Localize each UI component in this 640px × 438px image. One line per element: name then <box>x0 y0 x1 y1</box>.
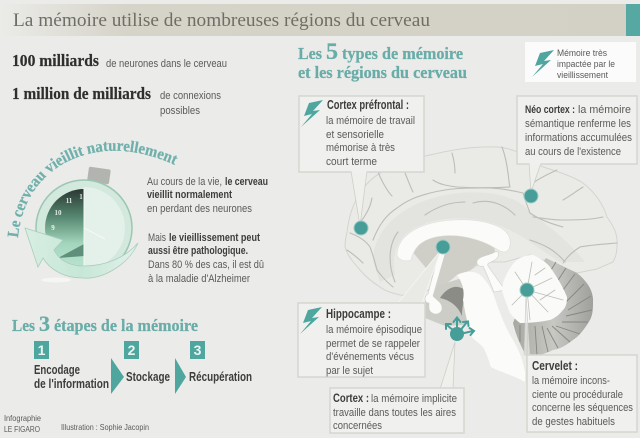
panel: cortex: concernées <box>333 420 382 432</box>
panel: cortex prefrontal: la mémoire de travail <box>326 115 415 127</box>
heading: 5 types <box>298 39 467 82</box>
icon: stopwatch with arrow: 11 <box>66 197 73 205</box>
icon: stopwatch with arrow: 10 <box>54 209 62 217</box>
panel: cortex: Cortex : <box>333 391 369 405</box>
pointer: cortex <box>440 342 455 389</box>
panel: cortex prefrontal: Cortex préfrontal : <box>327 98 409 112</box>
credits: Illustration : Sophie Jacopin <box>61 422 149 432</box>
text block: aging explanation: Mais <box>148 232 166 244</box>
panel: cervelet: Cervelet : <box>532 359 578 373</box>
panel: cervelet <box>524 295 637 432</box>
heading: 3 stages: étapes de la mémoire <box>54 316 198 335</box>
icon: stopwatch with arrow: 1 <box>79 193 83 201</box>
panel: hippocampe: la mémoire épisodique <box>326 324 422 336</box>
panel: cortex prefrontal: mémorise à très <box>326 142 395 154</box>
text block: aging explanation: à la maladie d'Alzheimer <box>148 273 250 285</box>
step 2: storage <box>124 341 170 384</box>
key figures: de connexions <box>160 90 221 102</box>
panel: neo cortex: Néo cortex : <box>525 104 575 116</box>
limbic grey region <box>411 232 495 296</box>
brain illustration <box>345 147 617 382</box>
text block: aging explanation: le vieillissement peut <box>169 232 260 244</box>
credits: Infographie <box>4 413 41 423</box>
panel: cortex prefrontal: et sensorielle <box>326 129 384 141</box>
step 1: encoding: Encodage <box>34 363 80 377</box>
credits: LE FIGARO <box>4 424 40 434</box>
icon: prefrontal bolt <box>301 100 323 127</box>
pineal and stalk <box>477 252 505 292</box>
text block: aging explanation: Dans 80 % des cas, il est dû <box>148 259 264 271</box>
cerebellum white matter <box>502 255 567 323</box>
icon: stopwatch with arrow <box>25 167 138 282</box>
credits <box>4 413 149 434</box>
panel: neo cortex: la mémoire <box>578 104 631 116</box>
panel: hippocampe: par le sujet <box>326 365 373 377</box>
panel: cortex prefrontal: court terme <box>326 156 377 168</box>
step 1: encoding: 1 <box>38 342 46 358</box>
arrow: step 2 to 3 <box>175 358 186 394</box>
marker: prefrontal <box>354 221 368 235</box>
icon: legend bolt <box>532 50 554 77</box>
panel: hippocampe: Hippocampe : <box>326 307 391 321</box>
cingulate shading <box>373 192 585 282</box>
text block: aging explanation <box>147 176 268 285</box>
text block: aging explanation: Au cours de la vie, <box>147 176 222 188</box>
heading: 5 types: 5 <box>326 39 338 64</box>
brainstem <box>457 272 525 382</box>
step 3: retrieval: 3 <box>194 342 202 358</box>
step 1: encoding: de l'information <box>34 377 109 391</box>
key figures: 100 milliards <box>12 51 99 70</box>
panel: hippocampe: d'événements vécus <box>326 351 414 363</box>
panel: hippocampe: permet de se rappeler <box>326 338 420 350</box>
heading: 3 stages <box>12 311 198 336</box>
step 2: storage: 2 <box>128 342 136 358</box>
text block: aging explanation: le cerveau <box>225 176 268 188</box>
legend: Mémoire très <box>557 48 607 58</box>
pointer: cervelet <box>524 295 530 355</box>
panel: cortex: travaille dans toutes les aires <box>333 407 456 419</box>
heading: 3 stages: 3 <box>39 311 50 336</box>
panel: cervelet: de gestes habituels <box>532 416 615 428</box>
lower grey region <box>425 278 472 326</box>
icon: hippocampe bolt <box>300 307 322 334</box>
step 3: retrieval: Récupération <box>189 370 252 384</box>
text block: aging explanation: vieillit normalement <box>147 189 232 201</box>
cerebrum <box>345 147 617 295</box>
legend: impactée par le <box>557 59 615 69</box>
heading: 5 types: Les <box>298 44 322 63</box>
text block: aging explanation: aussi être pathologique. <box>148 245 248 257</box>
marker: cortex with radiating arrows <box>446 318 474 341</box>
fornix and hippocampus <box>425 252 445 314</box>
key figures: de neurones dans le cerveau <box>106 58 227 70</box>
text block: aging explanation: en perdant des neurones <box>147 203 252 215</box>
panel: hippocampe <box>298 250 441 377</box>
key figures: possibles <box>160 105 200 117</box>
legend <box>525 42 636 82</box>
marker: neo cortex <box>524 189 538 203</box>
heading: 5 types: et les régions du cerveau <box>298 63 467 82</box>
heading: 3 stages: Les <box>12 316 35 335</box>
panel: cervelet: la mémoire incons- <box>532 375 610 387</box>
panel: cortex: la mémoire implicite <box>371 393 457 405</box>
arrow: step 1 to 2 <box>111 358 124 394</box>
panel: neo cortex: au cours de l'existence <box>525 146 621 158</box>
panel: cortex prefrontal <box>299 96 424 226</box>
marker: cervelet <box>520 283 534 297</box>
heading: 5 types: types de mémoire <box>342 44 463 63</box>
panel: neo cortex <box>517 96 637 192</box>
corpus callosum <box>397 220 510 261</box>
pointer: hippocampe <box>398 250 441 303</box>
step 2: storage: Stockage <box>126 370 170 384</box>
curved heading: aging brain: Le cerveau vieillit naturellement <box>7 140 178 238</box>
cerebellum lamellae <box>513 258 593 357</box>
step 3: retrieval <box>189 341 252 384</box>
header band <box>0 4 640 36</box>
key figures <box>12 51 227 117</box>
dark cavity <box>440 287 466 316</box>
legend: vieillissement <box>557 70 608 80</box>
icon: stopwatch with arrow: 9 <box>51 224 55 232</box>
panel: cortex <box>330 342 464 433</box>
marker: hippocampe <box>436 240 450 254</box>
key figures: 1 million de milliards <box>12 84 151 103</box>
panel: cervelet: ciente ou procédurale <box>532 389 623 401</box>
sulci <box>347 147 617 287</box>
title: La mémoire utilise de nombreuses régions du cerveau <box>13 10 431 31</box>
step 1: encoding <box>34 341 109 391</box>
pointer: prefrontal <box>351 171 367 226</box>
pointer: neo cortex <box>529 163 541 192</box>
